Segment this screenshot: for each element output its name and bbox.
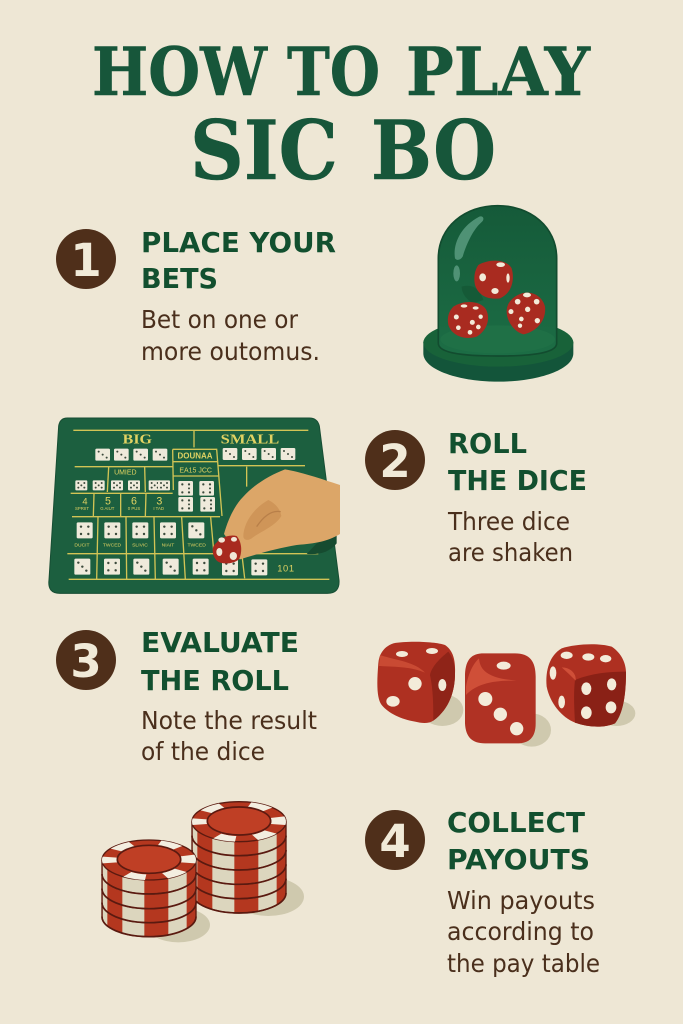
table labels: UMIED (114, 470, 137, 477)
step 2 heading: ROLL (448, 427, 527, 460)
step 1 description: Bet on one or (141, 305, 299, 334)
step 2 description: Three dice (447, 507, 570, 536)
die three (546, 644, 626, 727)
die one (377, 642, 455, 723)
table labels: G AIUT (100, 506, 115, 511)
table labels: 4 (82, 496, 88, 506)
step 1 number badge (56, 229, 116, 289)
icon: three red dice (377, 642, 635, 747)
table dice tiles (74, 448, 295, 575)
table gold lines (67, 430, 329, 579)
icon: dice under green dome (423, 206, 573, 382)
table labels (74, 431, 295, 573)
table labels: SLIVIC (132, 543, 148, 549)
step 1 description (141, 305, 320, 366)
step 4 description: according to (447, 917, 594, 946)
title (92, 33, 591, 199)
table labels: TWCED (188, 543, 206, 549)
die two (465, 653, 536, 743)
table labels: TWCED (103, 543, 122, 549)
icon: sic bo betting table with hand (49, 418, 340, 593)
step 3 number badge (56, 630, 116, 690)
step 2 number badge: 2 (379, 435, 411, 488)
table labels: EA15 JCC (179, 468, 212, 475)
table labels: 101 (277, 563, 295, 573)
step 4 description (447, 886, 600, 978)
right chip stack (192, 802, 286, 916)
table labels: DOUNAA (177, 452, 213, 461)
step 4 heading (447, 806, 590, 876)
step 4 number badge (365, 810, 425, 870)
step 2 description: are shaken (448, 538, 573, 567)
table labels: BIG (123, 432, 152, 447)
table labels: SPRIIT (75, 506, 89, 511)
table labels: 5 (105, 496, 111, 508)
step 2 heading (448, 427, 587, 497)
table labels: DUCIT (74, 543, 90, 549)
step 4 number badge: 4 (379, 815, 411, 868)
chip shadows (147, 877, 304, 942)
title: TO (287, 33, 380, 111)
step 2 description (447, 507, 573, 567)
table labels: NIAIT (162, 543, 174, 549)
hand holding a die (213, 469, 340, 563)
title: PLAY (406, 33, 591, 111)
table labels: I TAD (153, 506, 164, 511)
step 1 heading (141, 226, 336, 295)
step 2 number badge (365, 430, 425, 490)
step 1 description: more outomus. (141, 337, 320, 366)
step 4 description: Win payouts (447, 886, 595, 915)
step 4 heading: PAYOUTS (447, 843, 590, 876)
left chip stack (102, 840, 196, 939)
step 1 number badge: 1 (70, 234, 102, 287)
step 3 description (141, 706, 317, 766)
table labels: 3 (156, 496, 162, 508)
step 3 heading: THE ROLL (141, 664, 289, 697)
step 3 heading (141, 626, 299, 697)
table labels: 6 (131, 496, 137, 508)
title: BO (371, 104, 496, 199)
icon: two stacks of casino chips (102, 802, 304, 942)
step 3 heading: EVALUATE (141, 626, 299, 659)
step 3 number badge: 3 (70, 635, 102, 688)
step 3 description: Note the result (141, 706, 317, 735)
step 1 heading: PLACE YOUR (141, 226, 336, 259)
step 3 description: of the dice (141, 737, 265, 766)
title: HOW (92, 33, 268, 111)
dice shadows (421, 694, 635, 747)
step 4 heading: COLLECT (447, 806, 585, 839)
step 4 description: the pay table (447, 949, 600, 978)
table labels: SMALL (221, 431, 279, 446)
step 2 heading: THE DICE (448, 464, 587, 497)
title: SIC (190, 104, 338, 199)
step 1 heading: BETS (141, 262, 218, 295)
table labels: 0 PUS (128, 506, 140, 511)
